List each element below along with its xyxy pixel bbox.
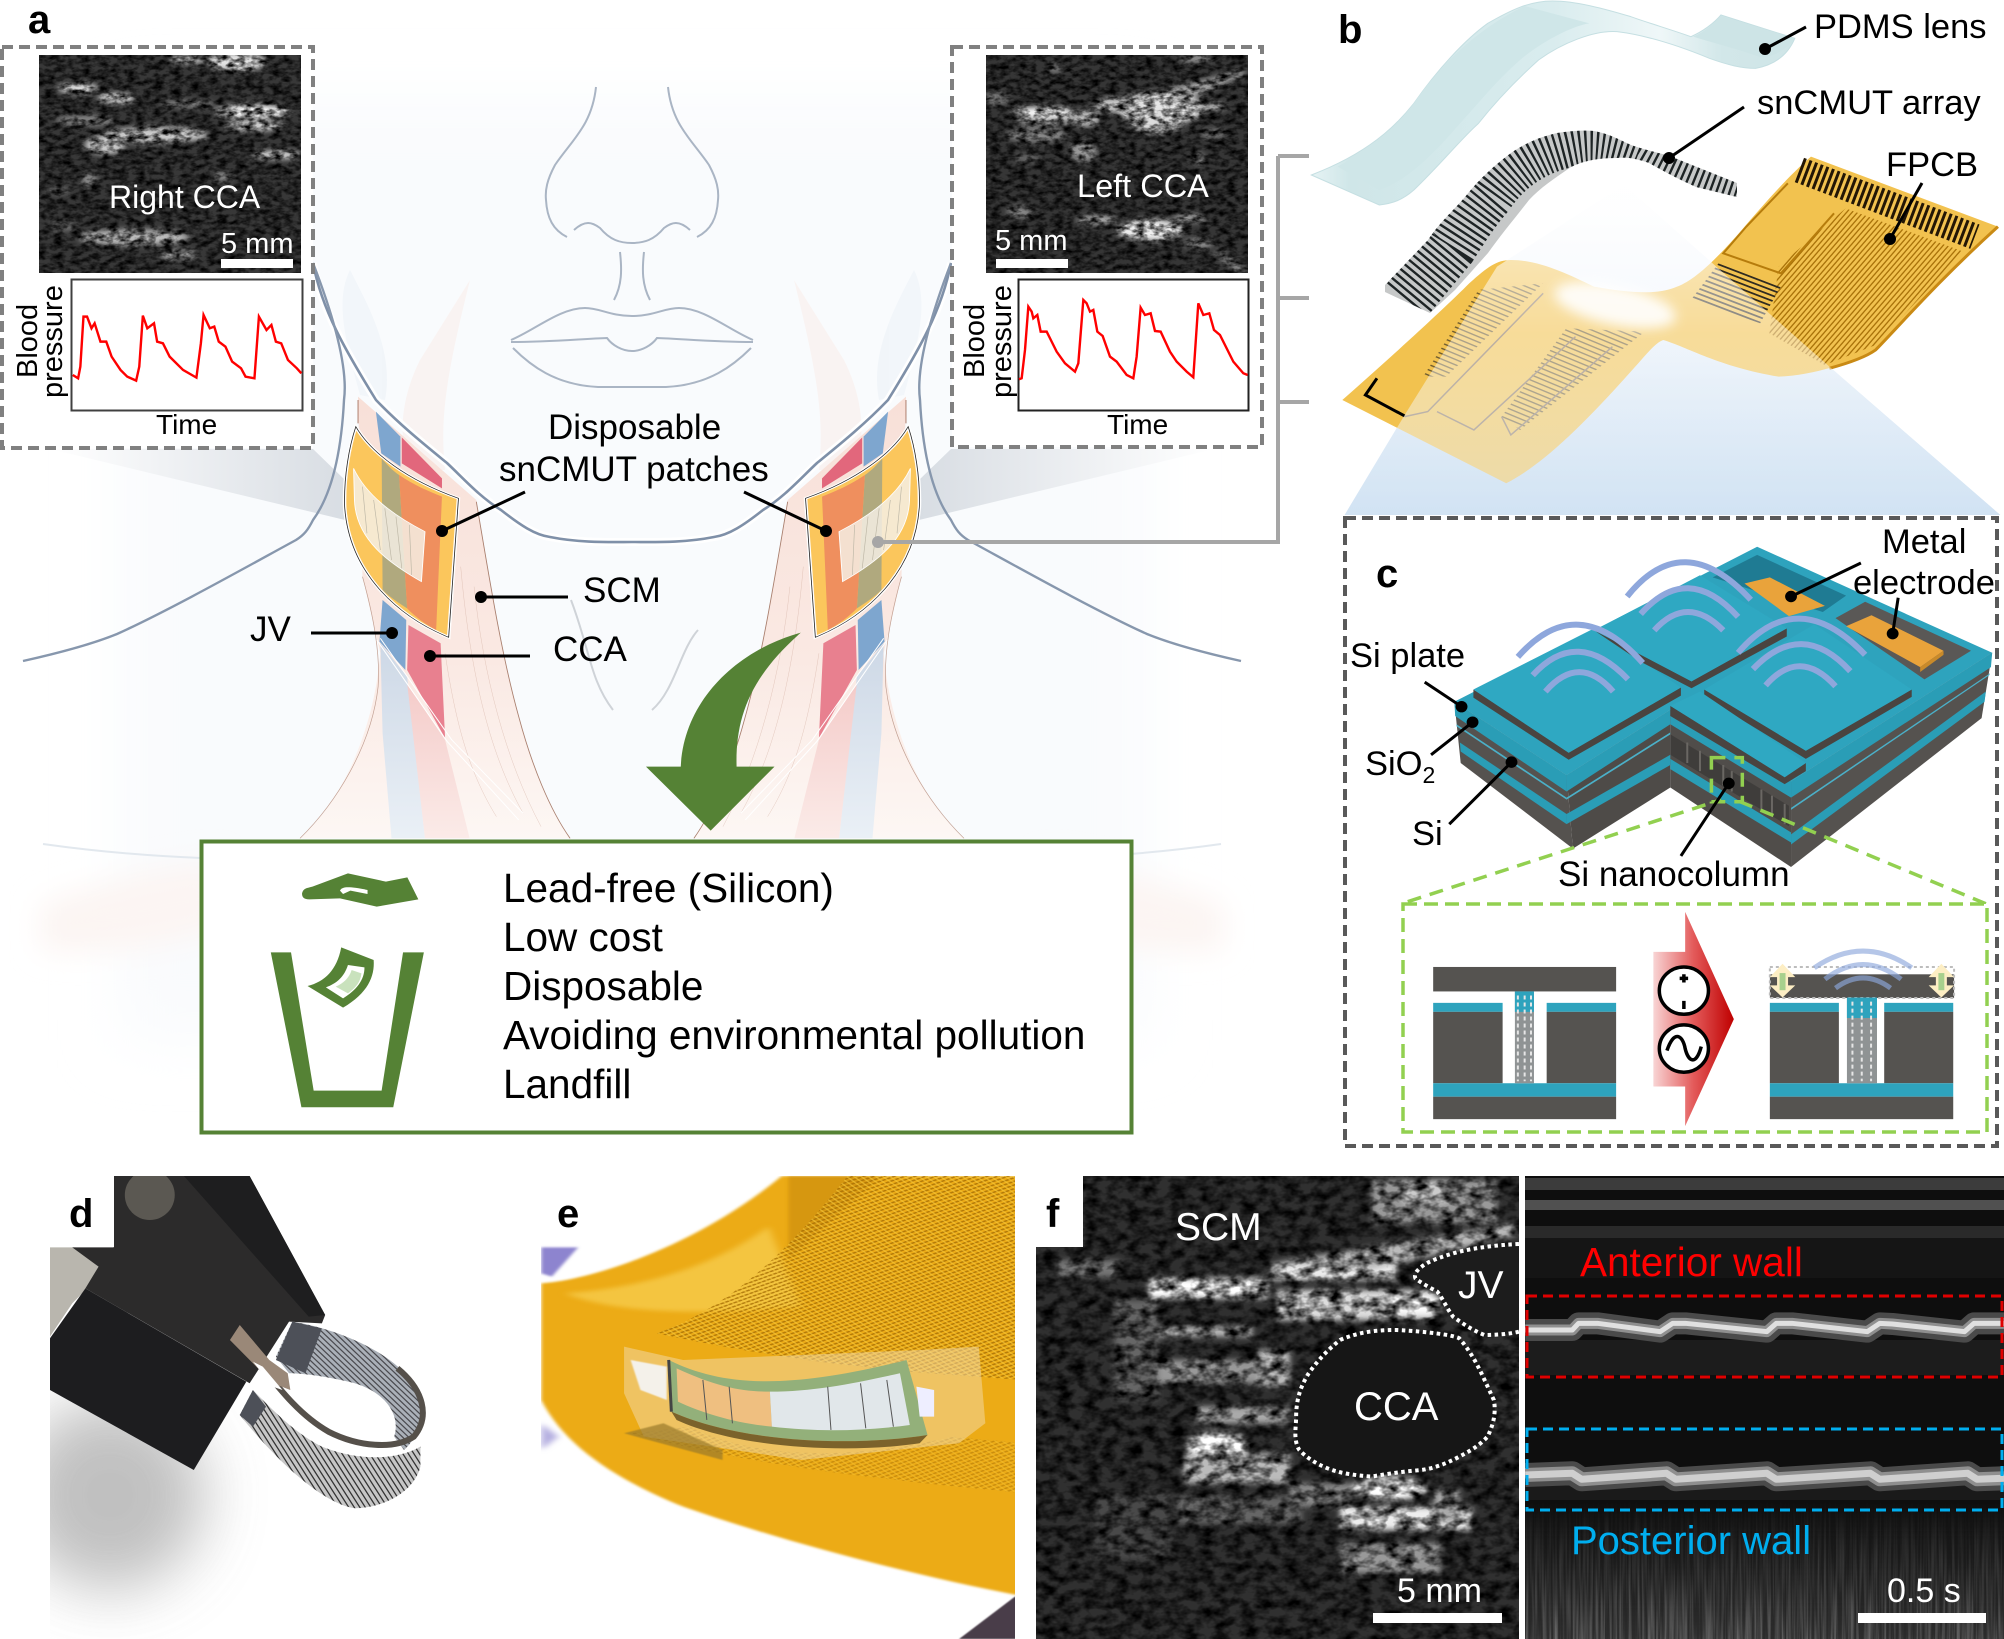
- vessel outlines: [1295, 1244, 1519, 1477]
- callout: PDMS lens: [1759, 8, 1987, 55]
- panel: f ultrasound B-mode image: [1036, 1176, 1519, 1639]
- label: SCM: SCM: [1175, 1206, 1262, 1249]
- callout: CCA: [424, 630, 628, 669]
- front of flexed array: [240, 1390, 420, 1508]
- FPCB copper traces: [1769, 208, 1963, 365]
- reverberation bands: [1525, 1178, 2004, 1238]
- panel: disposal benefits box: [202, 842, 1132, 1132]
- cast shadow: [15, 1400, 205, 1590]
- dashed frame: [952, 47, 1262, 447]
- callout: SCM: SCM: [583, 571, 661, 610]
- inset: nanocolumn operation: [1403, 904, 1987, 1132]
- panel: f M-mode wall motion: [1525, 1176, 2004, 1639]
- clamp lower block: [50, 1288, 246, 1470]
- tweezer tip: [230, 1325, 290, 1390]
- scale bar: 5 mm: 5 mm: [221, 228, 294, 260]
- array edge ring: [259, 1363, 423, 1445]
- label: Si plate: Si plate: [1350, 637, 1465, 675]
- dashed frame: [2, 47, 313, 448]
- icon: nose and lips: [511, 87, 753, 387]
- faint upper vessels: [343, 270, 921, 470]
- label: SiO2: SiO: [1365, 745, 1423, 783]
- panel label d: d: [69, 1192, 93, 1236]
- CCA lumen: [1295, 1330, 1495, 1477]
- projection triangle background: [1345, 185, 2000, 515]
- cross-section at rest: [1433, 967, 1616, 1119]
- scale bar: 5 mm: 5 mm: [995, 225, 1068, 257]
- callout: FPCB: [1884, 146, 1978, 245]
- label: Right CCA: Right CCA: [109, 179, 261, 215]
- panel: b exploded patch layers: [1311, 1, 2000, 515]
- panel: a neck anatomy illustration: [23, 87, 1241, 1040]
- region box: posterior wall: [1527, 1429, 2002, 1510]
- label: Posterior wall: Posterior wall: [1571, 1519, 1811, 1563]
- label: Si nanocolumn: Si nanocolumn: [1558, 855, 1790, 894]
- muscle and vessels: left neck: [300, 397, 570, 838]
- panel: left CCA inset: [952, 47, 1262, 447]
- scale bar: 0.5 s: 0.5 s: [1887, 1572, 1961, 1610]
- text block: benefits list: Disposable: [503, 963, 703, 1009]
- callout: JV: [250, 610, 398, 649]
- cross-section under actuation: [1770, 951, 1954, 1119]
- label: Metal electrode: electrode: [1853, 564, 1995, 602]
- clear tape: [624, 1347, 985, 1460]
- callout: Disposable snCMUT patches: snCMUT patches: [499, 450, 769, 489]
- panel label e: e: [557, 1192, 579, 1236]
- callout: CCA: CCA: [553, 630, 628, 669]
- axis label: Blood pressure: Blood: [959, 304, 991, 378]
- callout: Disposable snCMUT patches: Disposable: [548, 408, 721, 447]
- FPCB comb contacts: [1799, 170, 1975, 237]
- neck and shoulder outlines: [23, 263, 1241, 661]
- callout: JV: JV: [250, 610, 292, 649]
- label: Metal electrode: Metal: [1882, 523, 1966, 561]
- JV lumen: [1415, 1244, 1519, 1335]
- text block: benefits list: Lead-free (Silicon): [503, 865, 834, 911]
- scale bar: 0.5 s: [1858, 1572, 1986, 1623]
- clamp upper plate: [72, 1176, 325, 1383]
- blood pressure chart: [1018, 280, 1248, 410]
- panel: c snCMUT structure: [1345, 518, 1997, 1146]
- dark corner: [958, 1596, 1015, 1639]
- projection triangle overlay: [1345, 185, 2000, 515]
- FPCB layer: [1342, 157, 1998, 483]
- silicon array on board: [669, 1360, 928, 1441]
- callout: Disposable snCMUT patches: [436, 408, 832, 537]
- icon: trash bin with patch: [271, 947, 424, 1107]
- snCMUT array layer: [1380, 125, 1740, 320]
- arrow: red voltage arrow: [1653, 912, 1734, 1126]
- axis label: Blood pressure: [959, 285, 1018, 398]
- blood pressure chart: [72, 280, 302, 410]
- axis label: Blood pressure: Blood: [12, 304, 44, 378]
- icon: AC source: [1659, 1025, 1708, 1072]
- label: SiO2: 2: [1423, 762, 1435, 788]
- ultrasound image: left CCA: [985, 54, 1248, 273]
- yellow flexible board: [541, 1176, 1025, 1597]
- text block: benefits list: [503, 865, 1085, 1107]
- panel label f background: [1036, 1176, 1083, 1247]
- board traces: [657, 1176, 1025, 1380]
- sound waves: [1518, 562, 1865, 692]
- ultrasound image: right CCA: [39, 52, 301, 273]
- text block: benefits list: Low cost: [503, 914, 663, 960]
- callout: FPCB: FPCB: [1886, 146, 1978, 184]
- panel: e patch on FPCB photo: [541, 1176, 1025, 1639]
- panel label c: c: [1376, 552, 1398, 596]
- clamp metal edge: [50, 1247, 99, 1337]
- icon: DC source: [1659, 967, 1708, 1014]
- label: Si: Si: [1412, 815, 1443, 853]
- throat creases: [571, 600, 698, 710]
- back of flexed array: [276, 1322, 420, 1450]
- electrode wells: [1713, 555, 1846, 612]
- green detail marker: [1408, 758, 1986, 904]
- arrow: green curved down: [646, 633, 801, 831]
- muscle and vessels: right neck: [694, 397, 964, 838]
- PDMS lens layer: [1311, 1, 1795, 205]
- panel: right CCA inset: [2, 47, 313, 448]
- faint skin backdrop: [120, 100, 1150, 1040]
- panel: d flexed array photo: [50, 1176, 426, 1619]
- axis label: Blood pressure: pressure: [986, 285, 1018, 398]
- callout: PDMS lens: PDMS lens: [1814, 8, 1987, 46]
- posterior wall trace: [1525, 1473, 2004, 1479]
- icon: hand: [302, 873, 418, 907]
- axis label: Blood pressure: pressure: [37, 285, 69, 398]
- label: Metal electrode: [1853, 523, 1995, 602]
- label: Anterior wall: Anterior wall: [1580, 1239, 1803, 1285]
- 3D cell array: [1408, 547, 1992, 904]
- callout: snCMUT array: snCMUT array: [1757, 84, 1981, 122]
- dashed frame: [1345, 518, 1997, 1146]
- raised pads: [1473, 687, 1681, 760]
- fold highlight: [1550, 273, 1680, 337]
- connector: patch to panels b and c: [872, 156, 1309, 548]
- jaw outline: [313, 263, 951, 542]
- scale bar: 5 mm: 5 mm: [1397, 1572, 1482, 1610]
- shoulder wedges: [40, 449, 1224, 952]
- panel label f: f: [1046, 1192, 1060, 1236]
- axis label: Time: Time: [156, 409, 217, 440]
- text block: benefits list: Avoiding environmental pollution: [503, 1012, 1085, 1058]
- panel label b: b: [1338, 8, 1362, 52]
- axis label: Time: Time: [1107, 409, 1168, 440]
- panel label d background: [114, 1176, 115, 1247]
- callout: SCM: [475, 571, 661, 610]
- label: CCA: CCA: [1354, 1385, 1439, 1429]
- label: Left CCA: Left CCA: [1077, 168, 1209, 204]
- label: JV: JV: [1458, 1264, 1504, 1307]
- scale bar: 5 mm: [1373, 1572, 1502, 1623]
- echo shadow under walls: [1525, 1340, 2004, 1500]
- text block: benefits list: Landfill: [503, 1061, 631, 1107]
- region box: anterior wall: [1527, 1296, 2002, 1377]
- callout: snCMUT array: [1663, 84, 1981, 164]
- leader lines: [1425, 563, 1898, 856]
- anterior wall trace: [1525, 1323, 2004, 1332]
- axis label: Blood pressure: [12, 285, 69, 398]
- tissue speckle: [1525, 1540, 2004, 1639]
